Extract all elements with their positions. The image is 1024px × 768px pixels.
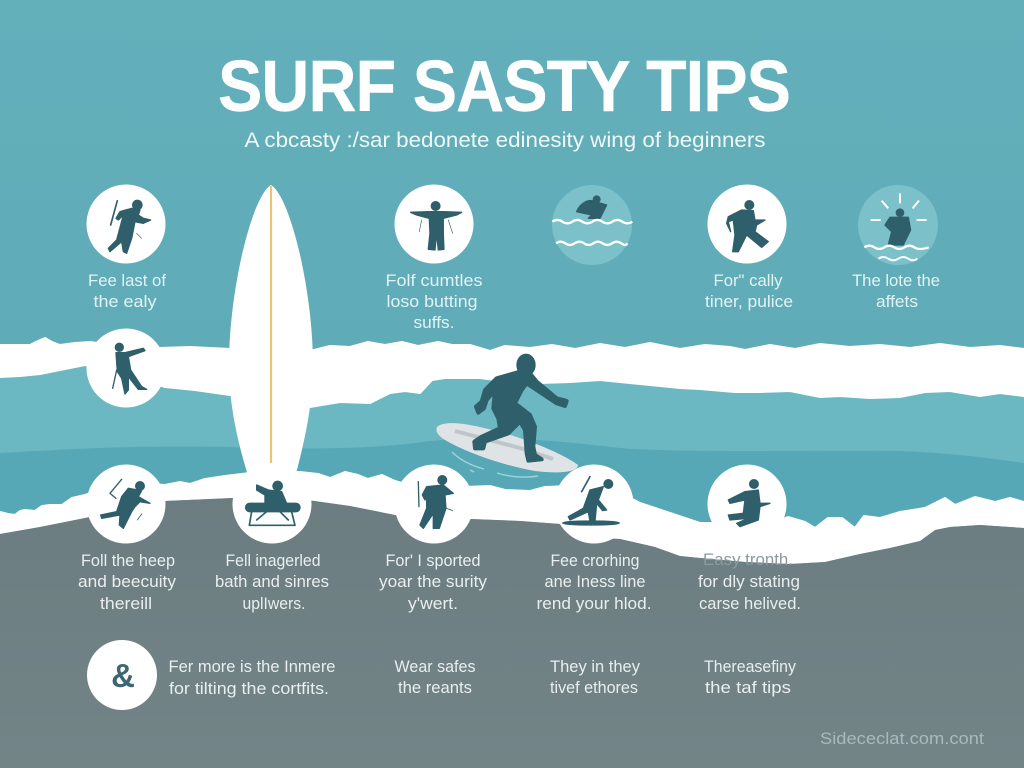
lower foam wave xyxy=(0,472,1024,563)
icon: mid left falling figure xyxy=(86,328,166,408)
icon: crouching figure on board xyxy=(554,464,634,544)
icon: walking figure with pole xyxy=(394,464,474,544)
icon: running figure xyxy=(708,184,786,264)
surfboard with stringer xyxy=(229,185,313,482)
label: top left xyxy=(88,272,166,311)
label: lower fifth xyxy=(698,551,801,613)
footer tip 1: Fer more is the Inmere xyxy=(168,658,336,676)
label: lower first: Foll the heep xyxy=(81,552,175,570)
label: lower third: y'wert. xyxy=(408,595,458,613)
footer tip 3: They in they xyxy=(550,658,641,676)
label: top fourth: tiner, pulice xyxy=(705,293,793,311)
icon: jumping figure xyxy=(708,464,786,544)
label: lower fourth xyxy=(536,552,652,613)
icon: ampersand badge: & xyxy=(111,657,135,694)
label: lower first xyxy=(78,552,177,613)
surfer on board xyxy=(436,354,578,477)
footer tip 2: the reants xyxy=(398,679,472,697)
label: lower third xyxy=(379,552,488,613)
icon: figure on trampoline xyxy=(232,464,312,544)
label: top left: Fee last of xyxy=(88,272,166,290)
label: lower fourth: Fee crorhing xyxy=(550,552,640,570)
body xyxy=(474,354,567,461)
label: lower first: thereill xyxy=(100,595,152,613)
footer tip 1 xyxy=(168,658,336,698)
label: lower fourth: ane Iness line xyxy=(544,573,646,591)
label: top right: affets xyxy=(876,293,918,311)
label: top right xyxy=(852,272,940,311)
label: lower fifth: Easy tronth. xyxy=(703,551,793,569)
footer tip 1: for tilting the cortfits. xyxy=(169,680,329,698)
footer tip 4: Thereasefiny xyxy=(704,658,797,676)
icon: falling with leash, top left xyxy=(86,184,166,264)
icon: ampersand badge xyxy=(87,640,157,710)
label: lower first: and beecuity xyxy=(78,573,177,591)
label: top right: The lote the xyxy=(852,272,940,290)
mid water band xyxy=(0,365,1024,470)
footer tip 2 xyxy=(394,658,476,697)
icon: figure in water with rays xyxy=(858,185,938,265)
gray sand area xyxy=(0,498,1024,768)
footer tip 3: tivef ethores xyxy=(550,679,638,697)
label: top centre: Folf cumtles xyxy=(386,272,482,290)
label: lower second: Fell inagerled xyxy=(226,552,320,570)
icon: arms out figure xyxy=(394,184,474,264)
label: top fourth: For" cally xyxy=(714,272,783,290)
label: lower third: For' I sported xyxy=(386,552,480,570)
subtitle: A cbcasty :/sar bedonete edinesity wing of beginners xyxy=(244,129,766,152)
deep water band xyxy=(0,439,1024,560)
footer tip 2: Wear safes xyxy=(394,658,476,676)
board xyxy=(436,423,578,472)
label: lower second: uplIwers. xyxy=(242,595,306,613)
title: SURF SASTY TIPS xyxy=(218,47,790,127)
label: top left: the ealy xyxy=(94,293,157,311)
label: top centre: loso butting xyxy=(386,293,478,311)
icon: lower left falling figure xyxy=(86,464,166,544)
label: lower third: yoar the surity xyxy=(379,573,488,591)
label: lower second xyxy=(215,552,329,613)
footer tip 4: the taf tips xyxy=(705,679,791,697)
label: top centre: suffs. xyxy=(414,314,454,332)
wake lines xyxy=(452,452,538,477)
label: lower second: bath and sinres xyxy=(215,573,329,591)
icon: swimmer in waves xyxy=(552,185,632,265)
footer tip 3 xyxy=(550,658,641,697)
website credit: Sidececlat.com.cont xyxy=(820,730,984,748)
footer tip 4 xyxy=(704,658,797,697)
label: lower fifth: for dly stating xyxy=(698,573,800,591)
label: lower fifth: carse helived. xyxy=(699,595,801,613)
label: top centre xyxy=(386,272,482,332)
label: lower fourth: rend your hlod. xyxy=(536,595,652,613)
label: top fourth xyxy=(705,272,793,311)
upper foam wave xyxy=(0,338,1024,407)
